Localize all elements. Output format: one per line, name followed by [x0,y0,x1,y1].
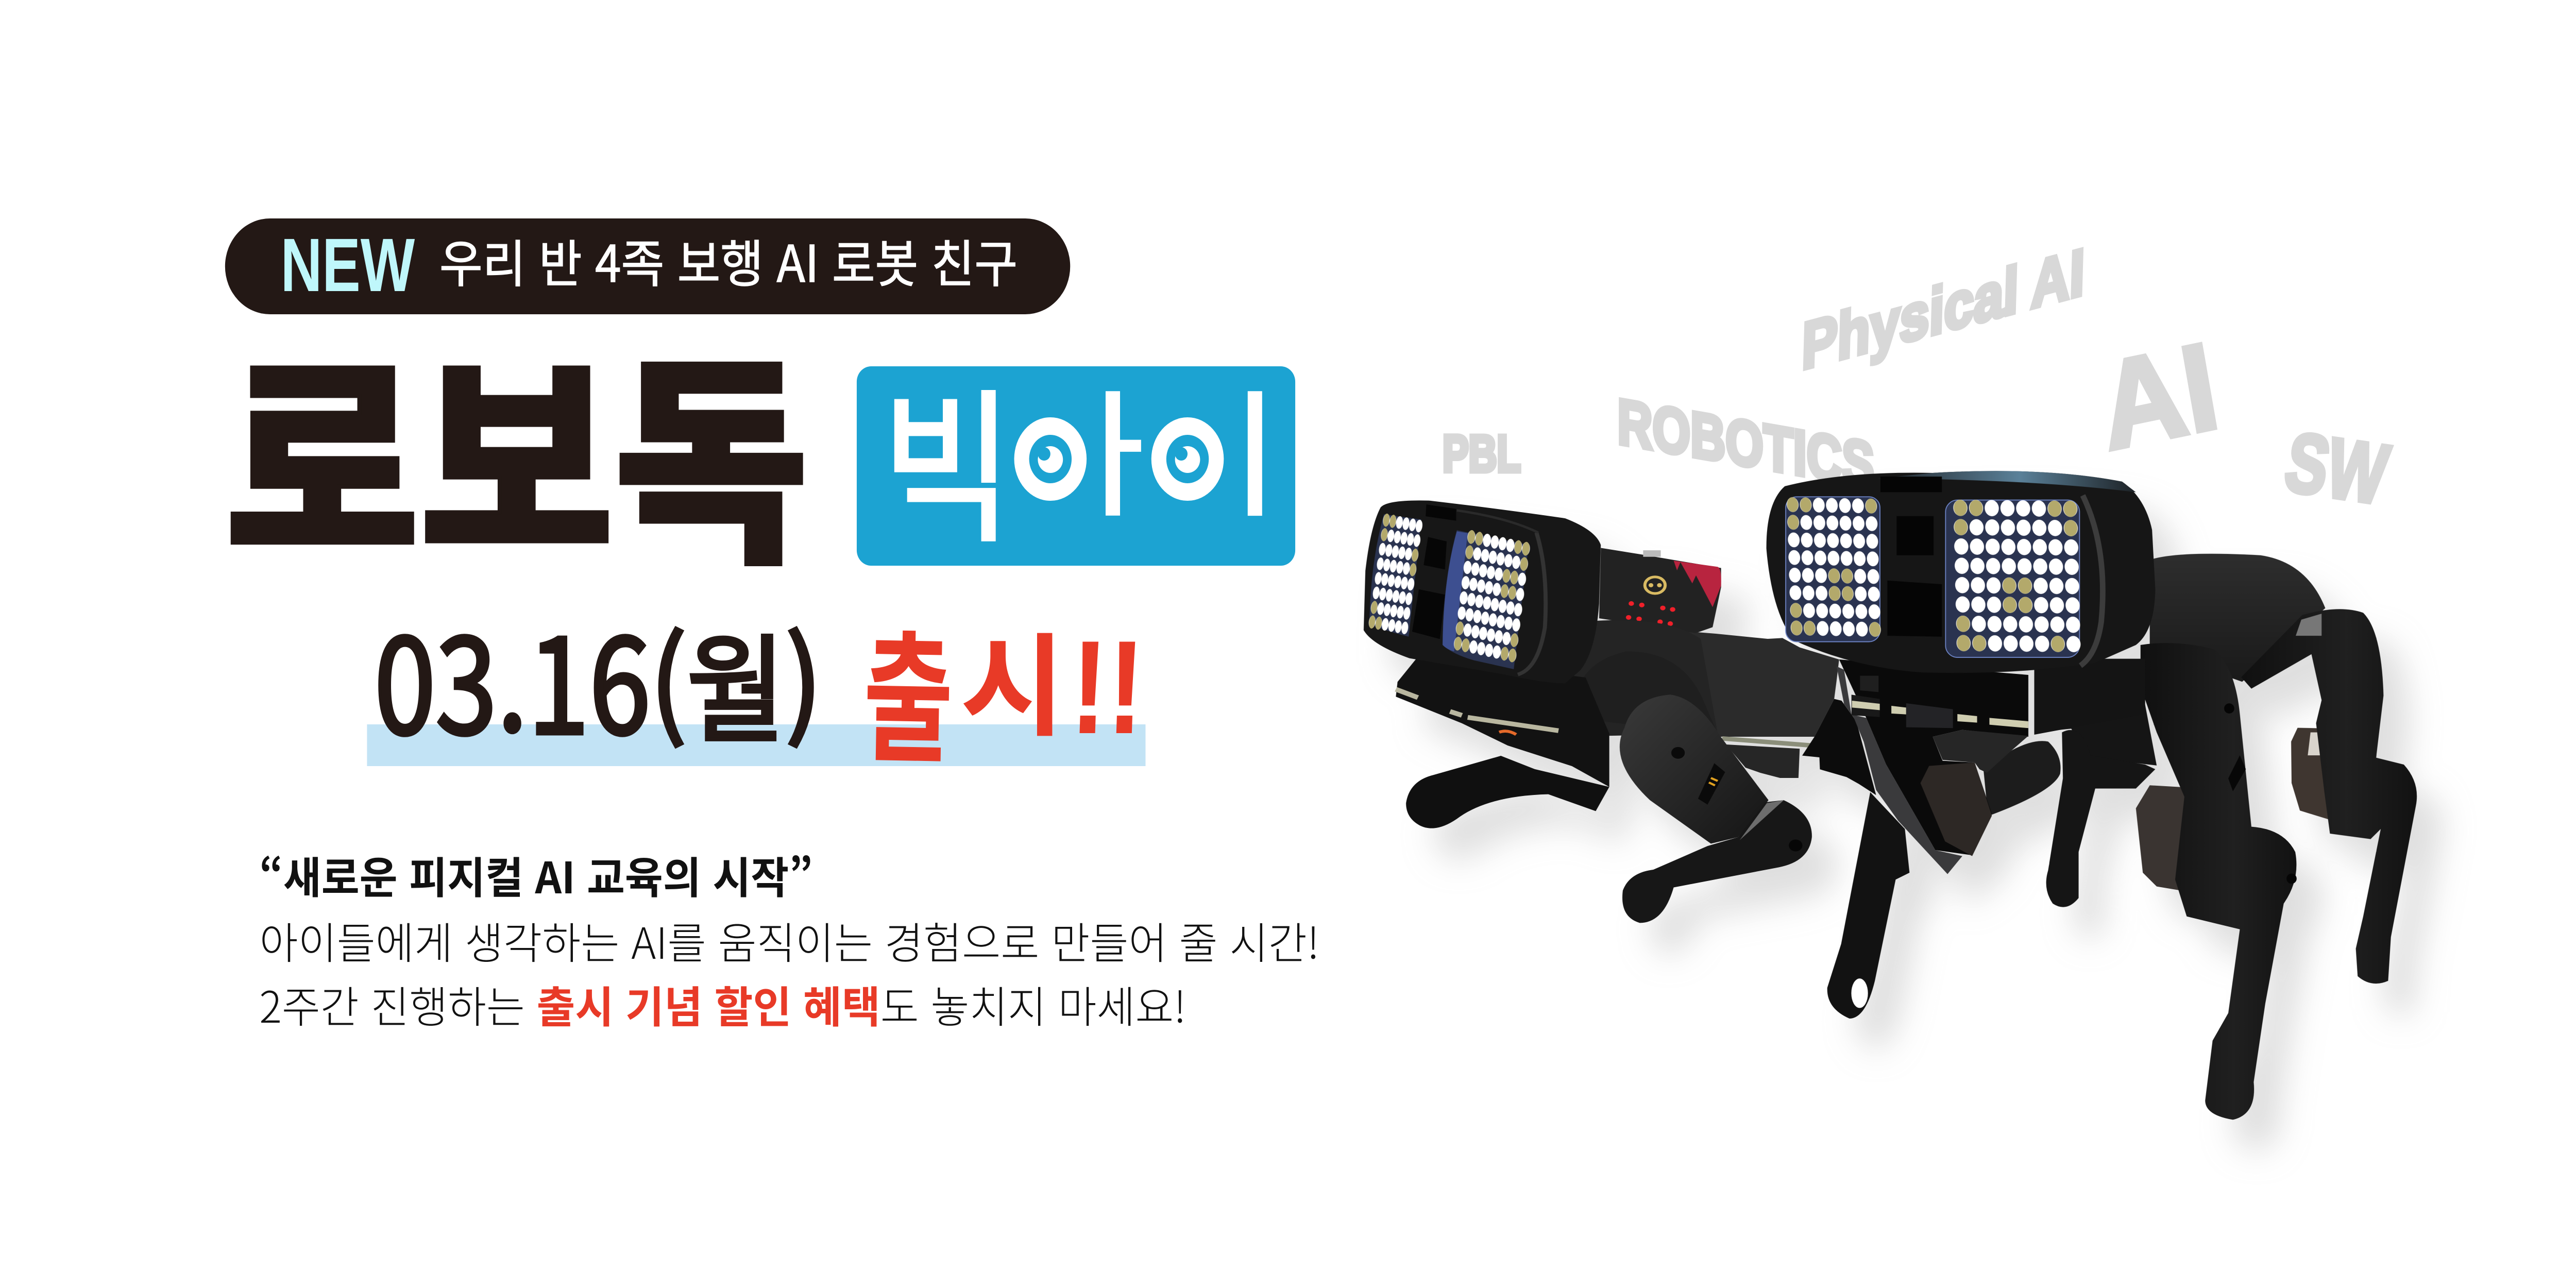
logo badge: 빅아이 [857,366,1295,566]
pill subtitle: 우리 반 4족 보행 AI 로봇 친구 [439,224,1018,297]
front electronics [1396,657,1609,787]
robot illustration [1364,471,2417,1120]
head shell [1364,500,1601,683]
robot soft shadow [1390,502,2444,1150]
tag SW: SW [2279,416,2395,521]
rear robot parts [1984,554,2417,984]
torso underside [1726,744,1800,778]
left fore-leg [1406,756,1609,828]
release exclamation [862,585,1146,791]
title: 로보독: 로보독 [225,342,808,590]
shoulder fill [1562,620,1718,737]
release date: 03.16 [374,582,651,772]
lower leg [1622,800,1812,923]
right eye [1443,529,1531,669]
tag PBL: PBL [1443,425,1521,483]
head slots [1412,504,1456,639]
left eye [1368,512,1423,637]
head shell [1766,471,2155,673]
logo syllable 빅: 빅 [882,379,1013,562]
rear hip [1802,699,1876,795]
rear tray [2034,705,2157,766]
torso stripe [1722,738,1821,746]
rear battery [2291,728,2339,820]
release exclamation: 시 [960,598,1065,758]
tag Physical AI: Physical AI [1801,234,2086,383]
description text [259,844,1319,1036]
chest dark cavity [1839,659,2028,855]
large robot head [1766,471,2155,673]
logo syllable 아: 아 [1013,382,1144,533]
front battery rear-right [2136,785,2189,891]
large robot legs [1827,643,2297,1120]
floating keyword tags [1443,234,2395,521]
quote line: “새로운 피지컬 AI 교육의 시작” [259,844,813,906]
release exclamation: 출 [862,585,955,791]
thigh [1620,694,1769,844]
robot torso [1652,629,1876,795]
right eye [1945,498,2081,657]
header pill [225,218,1070,314]
torso body [1652,629,1839,737]
tray right [2034,659,2145,735]
line two: 아이들에게 생각하는 AI를 움직이는 경험으로 만들어 줄 시간! [259,909,1319,972]
tag ROBOTICS: ROBOTICS [1617,385,1874,501]
left eye [1786,496,1882,642]
tag AI: AI [2090,317,2227,476]
shoulder arch [1572,651,1718,734]
chest plate [1837,666,1962,874]
large robot chest [1837,659,2028,874]
highlight band [367,724,1145,766]
eye 2 [1147,379,1242,523]
head edge [1518,533,1546,674]
far rear leg [2241,609,2417,984]
rear body [2150,554,2325,682]
head slots [1880,477,1942,637]
logo syllable 이: 이 [1148,382,1279,533]
release exclamation: !! [1069,614,1146,762]
tray strips [1852,676,2028,728]
NEW label: NEW [281,223,415,308]
front right leg [2141,643,2296,1120]
head side edge [2080,496,2103,666]
line three: 2주간 진행하는 출시 기념 할인 혜택 도 놓치지 마세요! [259,973,1186,1036]
eye 1 [1007,379,1103,523]
micro:bit board [1599,548,1721,633]
front left leg [1827,792,1909,1019]
release date: (월) [650,597,822,766]
front battery [1921,762,1992,856]
rear left leg [2046,730,2155,907]
chest sheet [1933,730,2028,773]
head top reflection [1877,471,2136,492]
rear left thigh [1984,741,2061,816]
small foreground robot [1364,500,1812,923]
release date [374,582,822,772]
